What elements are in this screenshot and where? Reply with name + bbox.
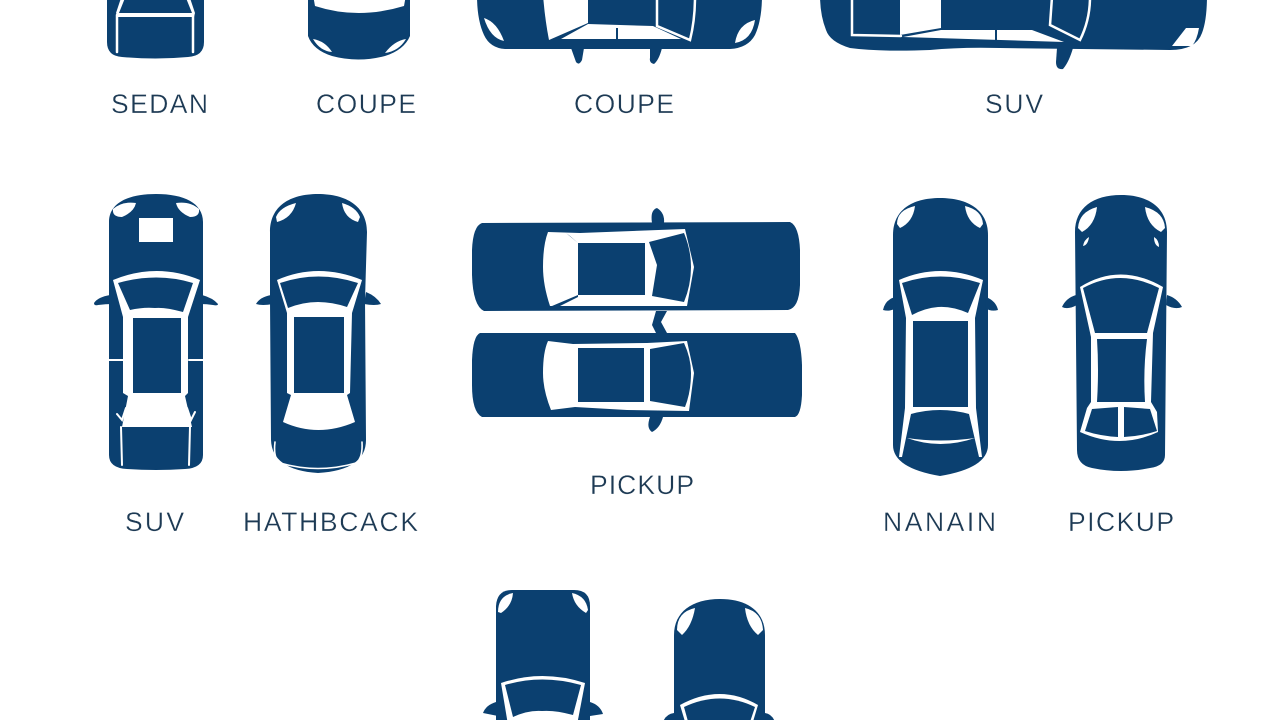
label: suv top: SUV: [985, 89, 1043, 119]
car: coupe, top row centre: [477, 0, 762, 64]
label: coupe left: COUPE: [316, 89, 416, 119]
pickup lower: [472, 333, 802, 432]
label: hatchback: HATHBCACK: [243, 507, 418, 537]
label: pickup right: PICKUP: [1068, 507, 1174, 537]
car: suv, top row right: [820, 0, 1207, 69]
car pair: pickups side view: [472, 208, 802, 432]
car: suv, middle row: [94, 194, 218, 470]
car: bottom row left: [483, 590, 603, 720]
pickup upper: [472, 208, 800, 333]
car: pickup, right column: [1062, 195, 1182, 471]
car: sedan, top row: [107, 0, 204, 58]
car: bottom row right: [663, 599, 775, 720]
label: nanain: NANAIN: [883, 507, 996, 537]
label: sedan: SEDAN: [111, 89, 208, 119]
label: pickup centre: PICKUP: [590, 470, 694, 500]
car: hatchback: [256, 194, 381, 473]
car: coupe, top row left: [308, 0, 410, 60]
label: coupe centre: COUPE: [574, 89, 674, 119]
label: suv middle: SUV: [125, 507, 184, 537]
car: minivan, labelled nanain: [883, 198, 998, 476]
